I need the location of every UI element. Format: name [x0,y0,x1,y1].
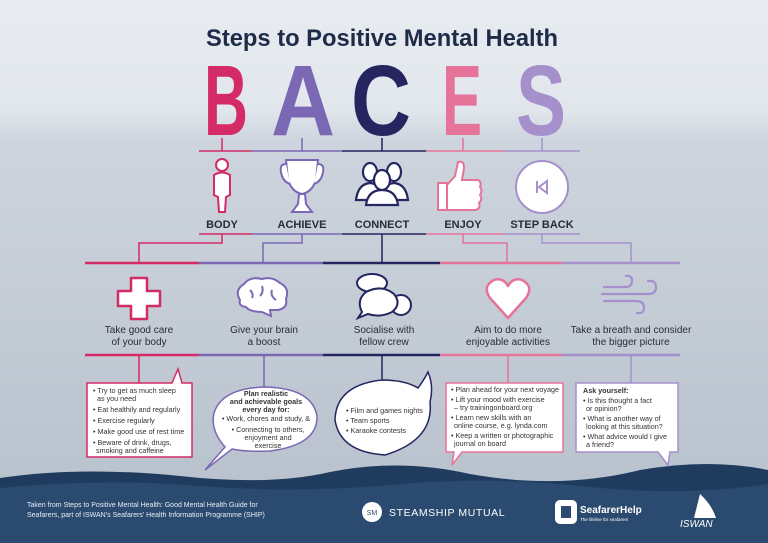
footer waves [0,464,768,543]
logo: steamship mutual [362,502,505,522]
callout: connect [335,372,432,455]
footer source text: Seafarers, part of ISWAN’s Seafarers’ Health Information Programme (SHIP) [27,512,265,519]
callout: enjoy: online course, e.g. lynda.com [454,421,548,430]
sub labels: Take good care [105,325,174,336]
callout: body: smoking and caffeine [96,446,164,455]
callout: enjoy: • Learn new skills with an [451,413,531,422]
callout: body: • Make good use of rest time [93,427,184,436]
callout: enjoy: journal on board [453,439,506,448]
callout: step back: • What is another way of [583,414,661,423]
sub labels: Aim to do more [474,325,542,336]
icon: cross [118,278,160,319]
callout: connect: • Film and games nights [346,406,423,415]
sub labels: enjoyable activities [466,337,550,348]
callout: achieve: every day for: [242,405,290,414]
callout: enjoy: • Plan ahead for your next voyage [451,385,559,394]
step labels [206,219,574,231]
callout: step back: • Is this thought a fact [583,396,652,405]
icon: speech bubbles [357,274,411,318]
sub labels: the bigger picture [592,337,670,348]
connectors top [139,138,631,263]
callout: step back: or opinion? [586,404,622,413]
callout: body: as you need [97,394,136,403]
logo: iswan: ISWAN [680,519,713,530]
callout: body: • Try to get as much sleep [93,386,176,395]
step labels: ENJOY [444,219,482,231]
callout: enjoy: – try trainingonboard.org [454,403,532,412]
callout: achieve: and achievable goals [230,397,302,406]
icon: brain [238,278,287,316]
footer source text: Taken from Steps to Positive Mental Health: Good Mental Health Guide for [27,502,258,509]
callout: enjoy [446,383,563,465]
callout: body: • Beware of drink, drugs, [93,438,171,447]
callout: step back: a friend? [586,440,614,449]
callout: enjoy: • Keep a written or photographic [451,431,554,440]
sub labels [105,325,692,348]
icon: thumbs up [438,162,482,210]
title: Steps to Positive Mental Health [206,25,558,52]
icon: step back circle [516,161,568,213]
icon: wind [602,276,656,313]
callout: body: • Eat healthily and regularly [93,405,181,414]
BACES letters [204,45,566,157]
step labels: STEP BACK [510,219,574,231]
footer source text [27,502,265,519]
callout: connect: • Karaoke contests [346,426,406,435]
callout: connect: • Team sports [346,416,390,425]
icon: body [214,159,230,212]
callout: achieve: • Work, chores and study, & [222,414,310,423]
callout: body: • Exercise regularly [93,416,155,425]
logo: seafarerhelp [555,500,642,524]
sub labels: Take a breath and consider [571,325,692,336]
icon: people [356,163,408,205]
icon: trophy [281,160,323,212]
logo: steamship mutual: SM [367,510,377,517]
logo: seafarerhelp: SeafarerHelp [580,505,642,516]
step labels: ACHIEVE [278,219,326,231]
BACES letters: C [351,45,411,157]
BACES letters: E [442,45,482,157]
callout: achieve: • Connecting to others, [232,425,304,434]
callout: achieve: Plan realistic [244,389,288,398]
step labels: BODY [206,219,239,231]
callout: step back: looking at this situation? [586,422,663,431]
callout: achieve: exercise [255,441,281,450]
callout: body [87,369,192,457]
icon: heart [487,279,529,318]
sub labels: of your body [111,337,167,348]
sub labels: fellow crew [359,337,410,348]
sub labels: Give your brain [230,325,298,336]
BACES letters: A [271,45,335,157]
BACES letters: S [516,45,566,157]
BACES letters: B [204,45,248,157]
callout: enjoy: • Lift your mood with exercise [451,395,545,404]
logo: iswan [680,494,716,530]
logo: seafarerhelp: The lifeline for seafarers [580,517,629,522]
step labels: CONNECT [355,219,409,231]
sub labels: a boost [248,337,281,348]
callout: step back: Ask yourself: [583,386,629,395]
sub labels: Socialise with [354,325,414,336]
callout: achieve: enjoyment and [244,433,292,442]
callout: step back [576,383,678,465]
callout: step back: • What advice would I give [583,432,667,441]
logo: steamship mutual: STEAMSHIP MUTUAL [389,507,505,519]
callout: achieve [205,387,317,470]
